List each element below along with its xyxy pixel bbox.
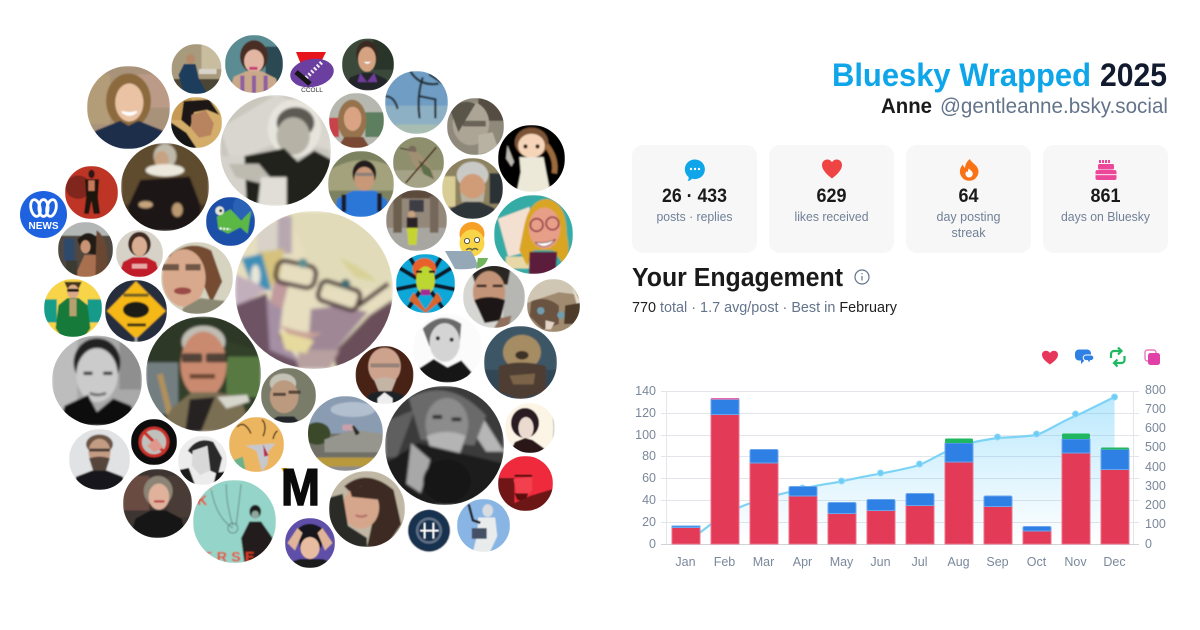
month labels: Sep xyxy=(986,555,1009,569)
icon: speech bubble xyxy=(685,159,705,181)
avatar: woman with dark hair and striped top xyxy=(225,35,283,93)
avatar: man in white beanie xyxy=(442,158,503,219)
right axis labels: 700 xyxy=(1145,402,1166,416)
icon: replies legend xyxy=(1075,350,1094,364)
icon: flame xyxy=(960,159,978,181)
month labels: Jan xyxy=(675,555,696,569)
avatar: black and white woman xyxy=(52,336,142,426)
icon: quotes legend xyxy=(1145,350,1160,365)
avatar: close-up woman with glasses xyxy=(161,242,233,314)
month labels: Apr xyxy=(793,555,812,569)
avatar: hummingbird xyxy=(393,137,444,188)
avatar: red figure illustration xyxy=(65,166,118,219)
avatar: sea otter xyxy=(484,326,557,399)
avatar: blue sky and branches xyxy=(385,71,448,134)
avatar: bald man with glasses xyxy=(356,346,414,404)
avatar: Dutch portrait of woman in ruff xyxy=(121,143,209,231)
month labels: Nov xyxy=(1064,555,1087,569)
title: Bluesky Wrapped xyxy=(832,57,1091,93)
right axis labels: 300 xyxy=(1145,479,1166,493)
avatar: man in profile xyxy=(171,97,222,148)
grid lines xyxy=(661,391,1139,544)
right axis labels: 0 xyxy=(1145,537,1152,551)
chart legend xyxy=(1042,348,1160,366)
stat card: days on Bluesky xyxy=(1043,145,1168,253)
avatar: ABC News logo xyxy=(20,191,67,238)
avatar: bearded man xyxy=(463,266,525,328)
avatar: captain logo: CCOLL xyxy=(301,87,323,94)
stat card: day posting streak: day posting xyxy=(936,209,1000,224)
avatar: emoji with laptop xyxy=(445,222,488,269)
avatar: ABC News logo: NEWS xyxy=(28,221,59,232)
avatar: teal poster with figure: ERSE xyxy=(203,548,254,564)
right axis labels xyxy=(1145,383,1166,551)
right axis labels: 400 xyxy=(1145,460,1166,474)
month labels: Aug xyxy=(947,555,970,569)
avatar: man in red shirt xyxy=(116,230,163,277)
month labels xyxy=(675,555,1126,569)
avatar: captain logo xyxy=(288,52,336,94)
user name and handle: @gentleanne.bsky.social xyxy=(940,95,1168,118)
avatar: woman in yellow skirt in cloister xyxy=(386,190,447,251)
stat card: likes received: 629 xyxy=(816,185,847,207)
user name and handle: Anne xyxy=(881,95,932,118)
month labels: Feb xyxy=(714,555,735,569)
avatar: cartoon blonde woman with glasses xyxy=(494,195,573,274)
avatar: cartoon chef on black xyxy=(498,125,565,192)
avatar: teal poster with figure xyxy=(193,480,276,563)
icon: heart xyxy=(822,160,842,178)
left axis labels: 120 xyxy=(635,406,656,420)
avatar: teal poster with figure: K xyxy=(197,492,208,508)
month labels: Mar xyxy=(753,555,774,569)
avatar: older man with glasses xyxy=(261,368,316,423)
avatar: women in a bar xyxy=(58,222,113,277)
left axis labels: 60 xyxy=(642,471,656,485)
avatar: smiling woman in navy shirt xyxy=(87,66,170,149)
month labels: Jun xyxy=(870,555,891,569)
avatar: black and white blonde woman xyxy=(178,436,227,485)
month labels: Jul xyxy=(912,555,927,569)
avatar: Carlton football club crest xyxy=(407,510,451,552)
avatar: man in green outfit on yellow xyxy=(44,279,102,337)
title: 2025 xyxy=(1100,57,1167,93)
icon: reposts legend xyxy=(1111,348,1124,366)
avatar: orange bird cartoon xyxy=(229,417,284,472)
avatar: blonde woman xyxy=(329,93,384,148)
icon: likes legend xyxy=(1042,351,1058,364)
avatar: man with camera xyxy=(172,44,222,94)
avatar: wombat road sign xyxy=(105,280,167,342)
avatar: curly haired woman portrait xyxy=(505,403,555,453)
engagement chart xyxy=(635,383,1166,569)
avatar cluster xyxy=(20,35,580,568)
avatar: red toned man xyxy=(498,456,553,511)
avatar: bearded man in black xyxy=(69,429,130,490)
stat card: posts and replies: posts · replies xyxy=(656,209,733,224)
left axis labels: 0 xyxy=(649,537,656,551)
month labels: May xyxy=(830,555,854,569)
avatar: woman with grey hair and red lipstick xyxy=(123,469,192,538)
avatar: cartoon man with sunburst background xyxy=(396,254,455,313)
avatar: woman in purple collar xyxy=(342,38,394,90)
left axis labels: 100 xyxy=(635,428,656,442)
stat card: day posting streak xyxy=(906,145,1031,253)
avatar: kitten xyxy=(527,279,580,332)
heading: Your Engagement: Your Engagement xyxy=(632,264,843,292)
right axis labels: 600 xyxy=(1145,421,1166,435)
avatar: woman with fringe xyxy=(329,471,405,547)
left axis labels: 40 xyxy=(642,493,656,507)
avatar: black and white woman in beanie, large xyxy=(220,95,331,206)
avatar: green fish cartoon xyxy=(206,197,255,246)
stat card: likes received xyxy=(769,145,894,253)
avatar: white house with flag xyxy=(308,396,383,471)
icon: birthday cake xyxy=(1096,160,1116,180)
stat card: posts and replies: 26 · 433 xyxy=(662,185,727,207)
avatar: woman in blue shirt xyxy=(328,151,394,217)
avatar: large black and white man with cat xyxy=(385,386,504,505)
avatar: woman with raised hands on purple xyxy=(285,518,335,568)
right axis labels: 500 xyxy=(1145,440,1166,454)
stacked bars xyxy=(672,398,1129,544)
left axis labels: 80 xyxy=(642,449,656,463)
avatar: man with glasses and grey hair xyxy=(146,316,261,432)
month labels: Oct xyxy=(1027,555,1047,569)
right axis labels: 200 xyxy=(1145,498,1166,512)
left axis labels: 20 xyxy=(642,515,656,529)
right axis labels: 800 xyxy=(1145,383,1166,397)
stat card: posts and replies xyxy=(632,145,757,253)
avatar: sepia woman with sunglasses xyxy=(447,98,504,155)
avatar: no-entry badge xyxy=(131,419,177,465)
avatar: teal poster with figure: E xyxy=(205,480,212,490)
stat card: days on Bluesky: days on Bluesky xyxy=(1061,209,1150,224)
avatar: large quilted artwork of man with glasses xyxy=(235,211,393,369)
engagement summary: 770 total · 1.7 avg/post · Best in February xyxy=(632,299,897,316)
month labels: Dec xyxy=(1103,555,1126,569)
stat card: likes received: likes received xyxy=(794,209,868,224)
cumulative area and line xyxy=(686,394,1118,544)
stat card: days on Bluesky: 861 xyxy=(1090,185,1121,207)
stat card: day posting streak: streak xyxy=(952,225,986,240)
stat card: day posting streak: 64 xyxy=(958,185,979,207)
logo: M: M xyxy=(281,459,320,517)
avatar: black and white face on white xyxy=(419,317,472,382)
icon: info xyxy=(855,270,869,284)
left axis labels xyxy=(635,384,656,551)
left axis labels: 140 xyxy=(635,384,656,398)
right axis labels: 100 xyxy=(1145,517,1166,531)
avatar: cartoon man on blue xyxy=(457,499,510,552)
